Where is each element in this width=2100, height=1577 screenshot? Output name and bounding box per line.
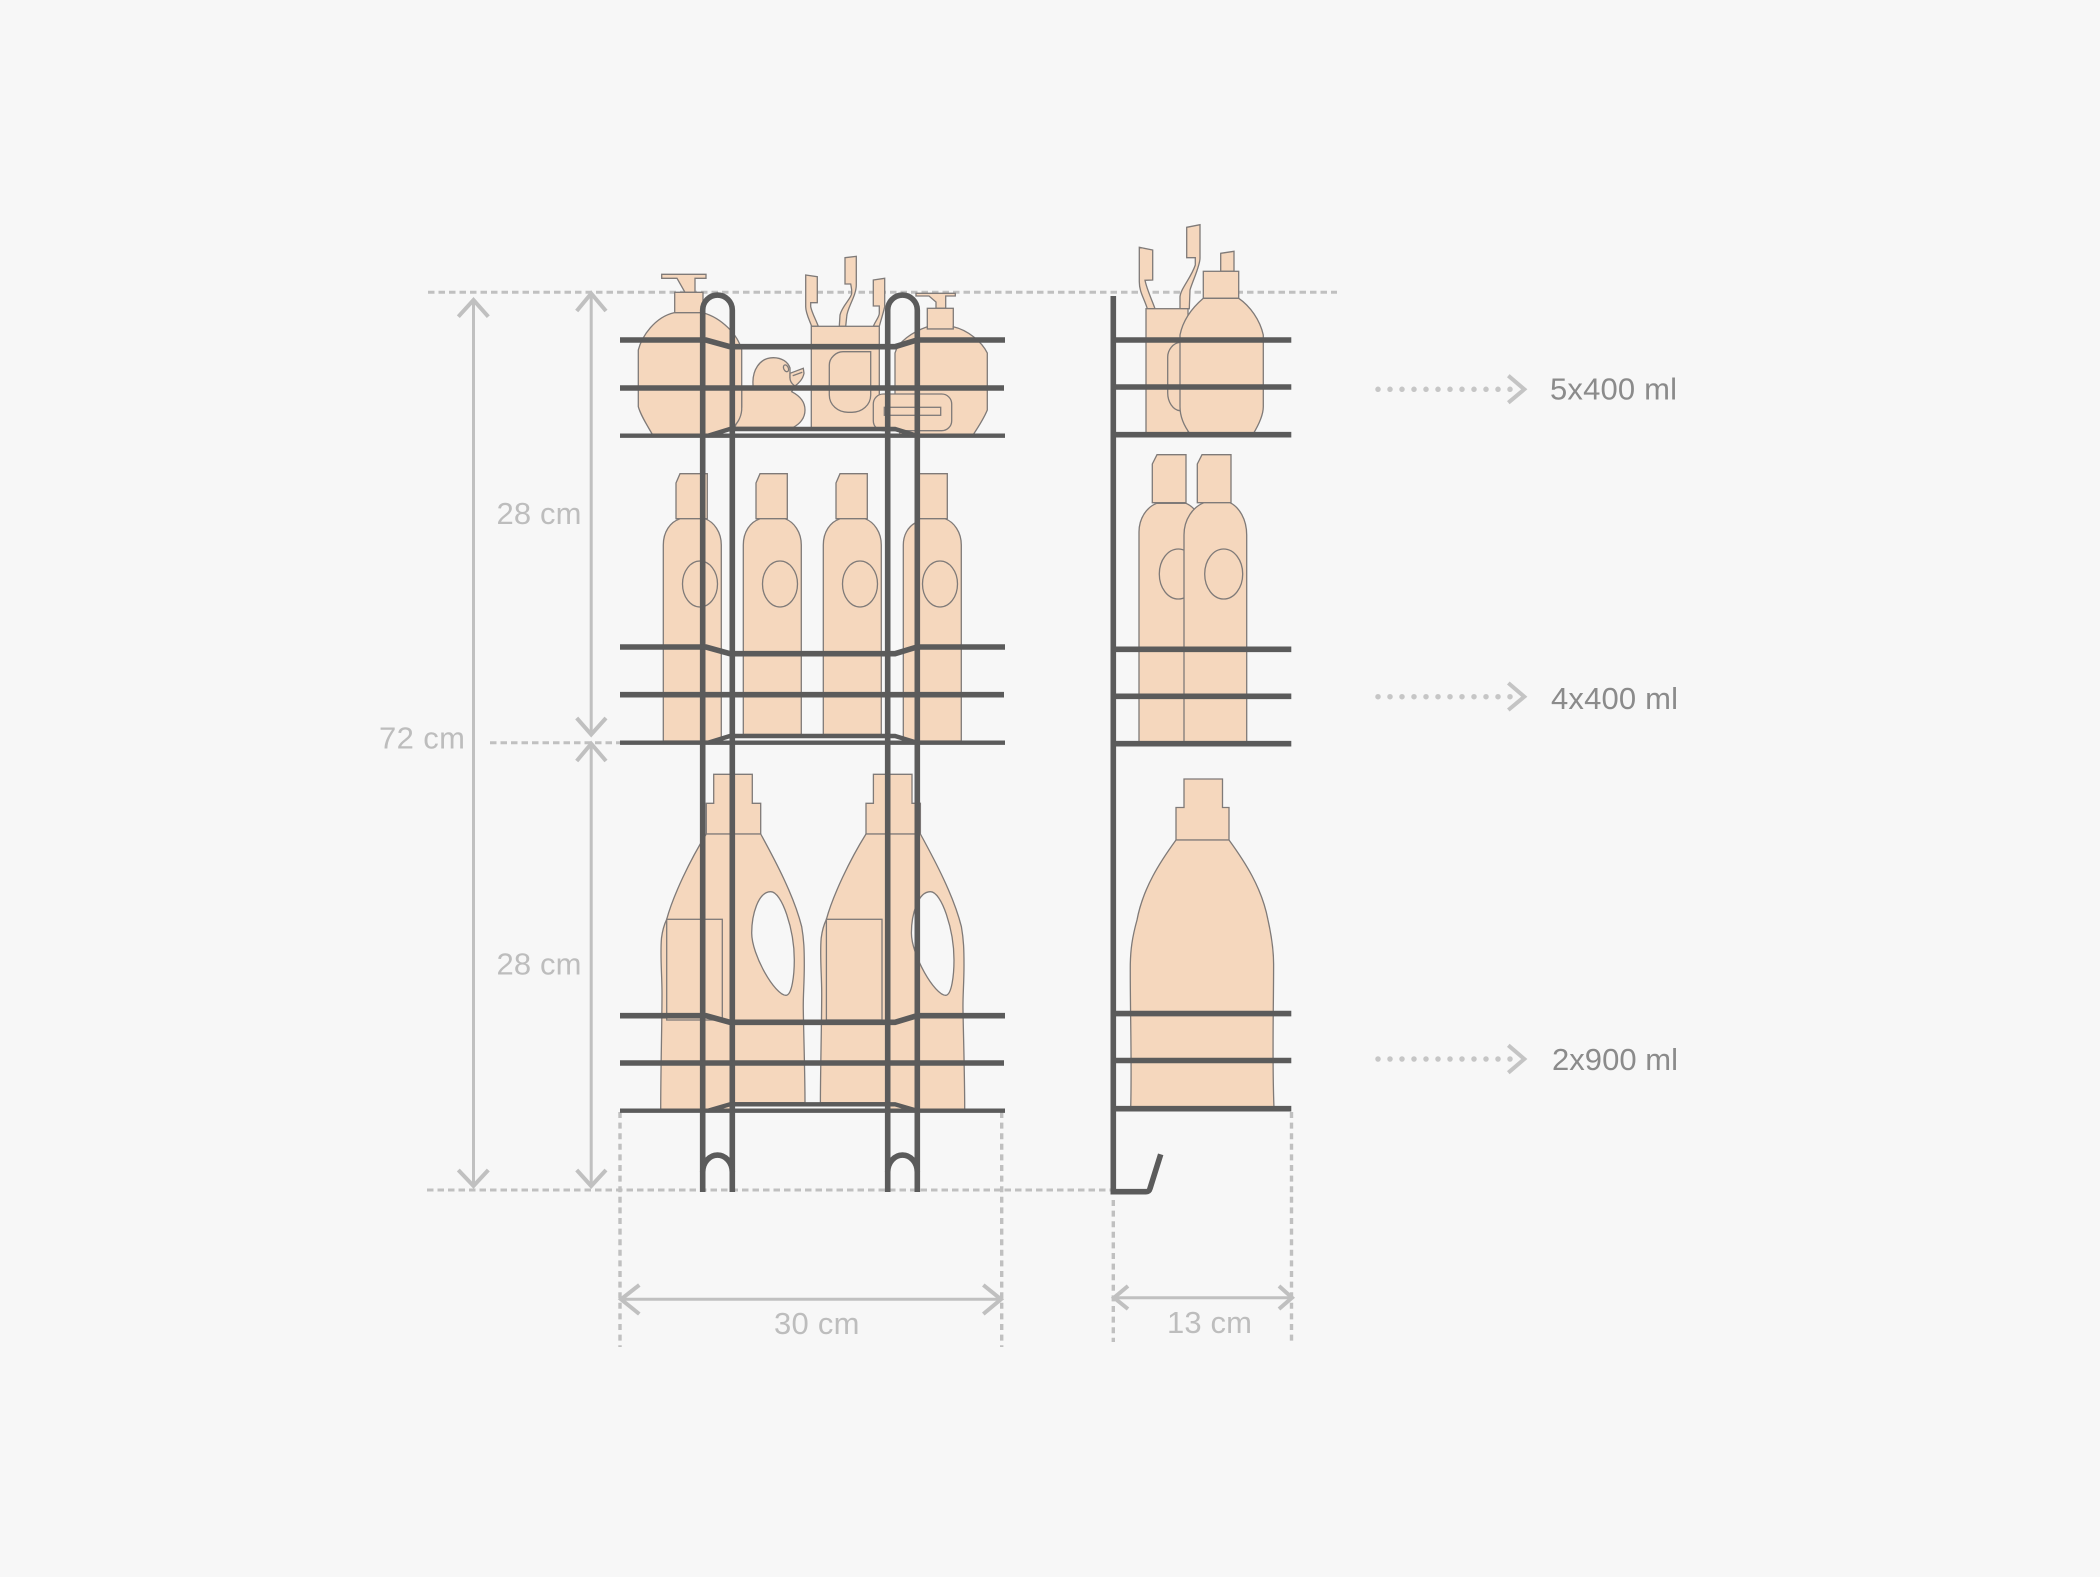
icon: bottle 2 [743, 474, 801, 734]
icon: bottle 1 [663, 474, 721, 741]
icon: soap dispenser left [638, 274, 742, 435]
icon: toothbrush cup [811, 326, 879, 428]
icon: bottle 3 [823, 474, 881, 734]
label: 72 cm: 72 cm [379, 720, 465, 756]
front view: 2 x 900 ml detergent bottles [661, 774, 965, 1109]
icon: side bottle back [1139, 455, 1198, 742]
icon: detergent bottle left [661, 774, 805, 1109]
arrow: middle shelf capacity [1378, 683, 1524, 710]
label: 4x400 ml: 4x400 ml [1551, 681, 1678, 716]
icon: side detergent bottle [1130, 779, 1274, 1108]
label: upper 28 cm: 28 cm [496, 496, 582, 531]
icon: side bottle front [1184, 455, 1247, 742]
icon: bottle 4 [903, 474, 961, 741]
icon: side toothbrushes [1139, 225, 1200, 309]
label: 2x900 ml: 2x900 ml [1552, 1042, 1678, 1077]
icon: side soap dispenser [1180, 251, 1263, 435]
icon: detergent bottle right [820, 774, 965, 1109]
icon: side cup [1146, 309, 1188, 435]
label: 30 cm: 30 cm [774, 1306, 860, 1341]
icon: toothbrushes [806, 256, 885, 326]
icon: soap bar [873, 394, 952, 431]
side view: wire rack frame [1113, 296, 1291, 1192]
label: 5x400 ml: 5x400 ml [1550, 372, 1677, 406]
arrow: upper 28 cm height [577, 294, 606, 735]
arrow: bottom shelf capacity [1378, 1045, 1524, 1073]
arrow: 30 cm width [621, 1285, 1001, 1314]
front view: top shelf items [638, 256, 987, 435]
arrow: lower 28 cm height [577, 744, 606, 1186]
arrow: 72 cm height [458, 300, 488, 1186]
icon: soap dispenser right [895, 293, 987, 435]
arrow: top shelf capacity [1378, 376, 1524, 403]
icon: rubber duck [735, 358, 805, 427]
label: lower 28 cm: 28 cm [496, 946, 582, 982]
arrow: 13 cm width [1114, 1286, 1292, 1309]
side view: shelf items [1130, 225, 1274, 1108]
front view: wire rack frame [620, 295, 1005, 1192]
front view: 4 x 400 ml bottles [663, 474, 961, 741]
label: 13 cm: 13 cm [1167, 1305, 1252, 1340]
